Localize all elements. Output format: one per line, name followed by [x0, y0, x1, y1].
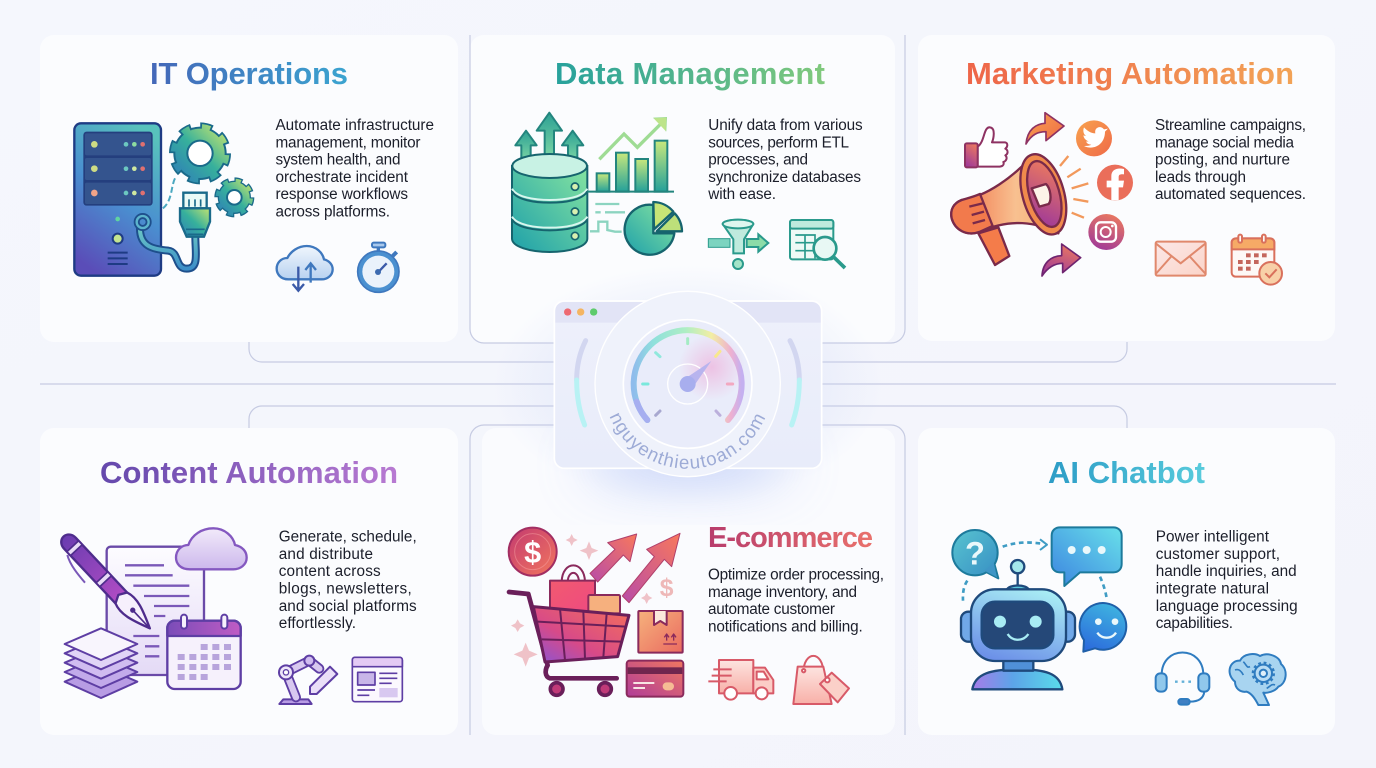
- icon: window buttons: [564, 308, 597, 316]
- icon: pie chart: [625, 202, 682, 255]
- icon: database with charts: [512, 113, 845, 269]
- icon: robot arm and pencil: [279, 656, 337, 704]
- icon: envelope: [1156, 242, 1206, 276]
- gauge arc low end: [637, 402, 647, 420]
- dollar symbol: $: [660, 575, 674, 602]
- needle with hub: [668, 361, 711, 404]
- icon: dashed arrows: [963, 539, 1107, 601]
- text: IT Operations description: orchestrate incident: [276, 169, 409, 186]
- disc: outer dial: [595, 291, 780, 477]
- icon: small gear: [218, 181, 251, 214]
- heading: E-commerce: E-commerce: [708, 522, 873, 554]
- dial haze: [678, 334, 745, 401]
- text: E-commerce description: manage inventory, and: [708, 584, 857, 601]
- text: AI Chatbot description: [1156, 529, 1298, 632]
- icon: server tower: [74, 123, 161, 276]
- icon: right side gauge: [790, 341, 799, 425]
- text: AI Chatbot description: customer support,: [1156, 546, 1280, 563]
- text: IT Operations description: system health, and: [276, 152, 400, 169]
- heading: AI Chatbot: AI Chatbot: [1048, 455, 1205, 490]
- panel: AI Chatbot card: [918, 428, 1335, 735]
- text: E-commerce description: Optimize order processing,: [708, 566, 884, 584]
- curved path for watermark: [608, 413, 767, 469]
- icon: facebook: [1097, 165, 1133, 201]
- text: AI Chatbot description: Power intelligent: [1156, 529, 1270, 546]
- icon: table search: [790, 220, 845, 268]
- watermark text: nguyenthieutoan.com: [610, 413, 765, 469]
- icon: instagram: [1088, 214, 1124, 250]
- panel: Marketing Automation card: [918, 35, 1335, 341]
- text: Data Management description: processes, and: [708, 152, 808, 169]
- icon: sound rays: [1060, 156, 1088, 218]
- icon: twitter: [1076, 120, 1112, 156]
- icon: network cable: [137, 193, 210, 269]
- icon: question bubble: [952, 530, 998, 578]
- text: Data Management description: [707, 117, 863, 203]
- icon: cloud: [176, 528, 247, 622]
- text: Content Automation description: and social platforms: [279, 598, 417, 615]
- icon: growth arrows: [590, 533, 680, 603]
- icon: fountain pen: [57, 530, 157, 635]
- panel: IT Operations card: [40, 35, 458, 342]
- icon: headset: [1156, 652, 1209, 705]
- icon: pen clip: [67, 555, 85, 583]
- text: AI Chatbot description: capabilities.: [1156, 615, 1233, 632]
- icon: share arrow top: [1026, 113, 1064, 144]
- heading: Marketing Automation: Marketing Automation: [966, 56, 1294, 91]
- icon: robot with chat bubbles: [952, 527, 1286, 705]
- icon: question bubble: ?: [965, 534, 985, 571]
- icon: shopping bag with tag: [793, 656, 849, 704]
- text: Content Automation description: and distribute: [279, 546, 373, 563]
- heading: IT Operations: IT Operations: [150, 56, 348, 91]
- icon: typing bubble: [1052, 527, 1122, 586]
- icon: share arrow bottom: [1042, 244, 1081, 276]
- text: IT Operations description: [276, 117, 434, 220]
- text: Marketing Automation description: manage social media: [1155, 134, 1294, 151]
- text: AI Chatbot description: integrate natural: [1156, 580, 1269, 598]
- icon: parcel box: [638, 611, 683, 653]
- icon: database cylinder: [512, 154, 587, 252]
- text: Content Automation description: blogs, newsletters,: [279, 580, 412, 598]
- text: Marketing Automation description: [1155, 117, 1306, 203]
- text: Marketing Automation description: Streamline campaigns,: [1155, 117, 1306, 134]
- text: AI Chatbot description: handle inquiries, and: [1156, 563, 1297, 580]
- panel: E-commerce card: [482, 428, 895, 735]
- heading: Content Automation: Content Automation: [100, 455, 398, 490]
- text: Marketing Automation description: leads through: [1155, 169, 1246, 186]
- text: IT Operations description: response workflows: [276, 186, 408, 203]
- text: Data Management description: with ease.: [707, 186, 776, 203]
- icon: credit card: [627, 661, 683, 697]
- text: IT Operations description: across platforms.: [276, 204, 390, 220]
- gauge arc: [634, 330, 742, 420]
- text: IT Operations description: management, monitor: [276, 134, 420, 151]
- text: E-commerce description: automate customer: [708, 601, 835, 618]
- icon: robot: [961, 560, 1075, 689]
- icon: dashed link: [162, 178, 175, 209]
- icon: upload arrows: [515, 113, 583, 160]
- text: E-commerce description: notifications and billing.: [708, 618, 863, 635]
- icon: document, pen, layers, cloud and calendar: [57, 528, 402, 704]
- text: E-commerce description: [708, 566, 884, 635]
- icon: cloud sync: [277, 246, 333, 291]
- text: Content Automation description: Generate, schedule,: [279, 529, 417, 546]
- panel: Content Automation card: [40, 428, 458, 735]
- text: Marketing Automation description: posting, and nurture: [1155, 152, 1290, 169]
- icon: smile bubble: [1080, 603, 1126, 652]
- icon: brain with gear: [1230, 654, 1286, 705]
- center speedometer dashboard: [554, 291, 822, 478]
- center halo glow: [493, 265, 883, 505]
- text: Data Management description: Unify data from various: [708, 117, 863, 134]
- icon: trend arrow: [599, 117, 667, 159]
- text: Content Automation description: effortlessly.: [279, 615, 356, 632]
- panel: browser window: [554, 301, 822, 468]
- icon: shopping bags: [550, 565, 620, 613]
- icon: funnel: [708, 220, 768, 269]
- icon: calendar with check: [1232, 235, 1282, 285]
- gauge ticks: [643, 339, 733, 415]
- icon: stopwatch: [358, 243, 399, 292]
- icon: sparkles: [511, 534, 652, 667]
- icon: large gear: [173, 127, 227, 180]
- text: Marketing Automation description: automated sequences.: [1155, 186, 1306, 203]
- text: Data Management description: sources, perform ETL: [708, 134, 849, 151]
- icon: stacked layers: [65, 628, 137, 698]
- text: AI Chatbot description: language processing: [1156, 598, 1298, 615]
- icon: data lines: [590, 204, 625, 232]
- panel: Data Management card: [470, 35, 895, 343]
- icon: browser layout: [352, 657, 402, 702]
- icon: dollar coin: $: [524, 536, 541, 570]
- icon: delivery truck: [708, 660, 773, 700]
- bar chart: [587, 141, 674, 192]
- disc: inner dial: [623, 320, 752, 448]
- icon: cart: [509, 592, 629, 695]
- text: Data Management description: synchronize databases: [708, 169, 861, 186]
- icon: thumbs up: [965, 127, 1008, 167]
- text: Content Automation description: content across: [279, 563, 381, 580]
- icon: left side gauge: [577, 341, 586, 425]
- icon: calendar: [167, 615, 241, 689]
- text: Content Automation description: [279, 529, 417, 632]
- icon: shopping cart with arrows: [509, 528, 849, 704]
- icon: server with gears and network cable: [74, 123, 399, 292]
- center bottom glow: [583, 445, 793, 485]
- icon: megaphone: [951, 149, 1075, 265]
- text: IT Operations description: Automate infrastructure: [276, 117, 434, 134]
- icon: dollar coin: [509, 528, 557, 576]
- heading: Data Management: Data Management: [555, 56, 825, 91]
- icon: megaphone with social media: [951, 113, 1282, 285]
- icon: document: [107, 547, 204, 675]
